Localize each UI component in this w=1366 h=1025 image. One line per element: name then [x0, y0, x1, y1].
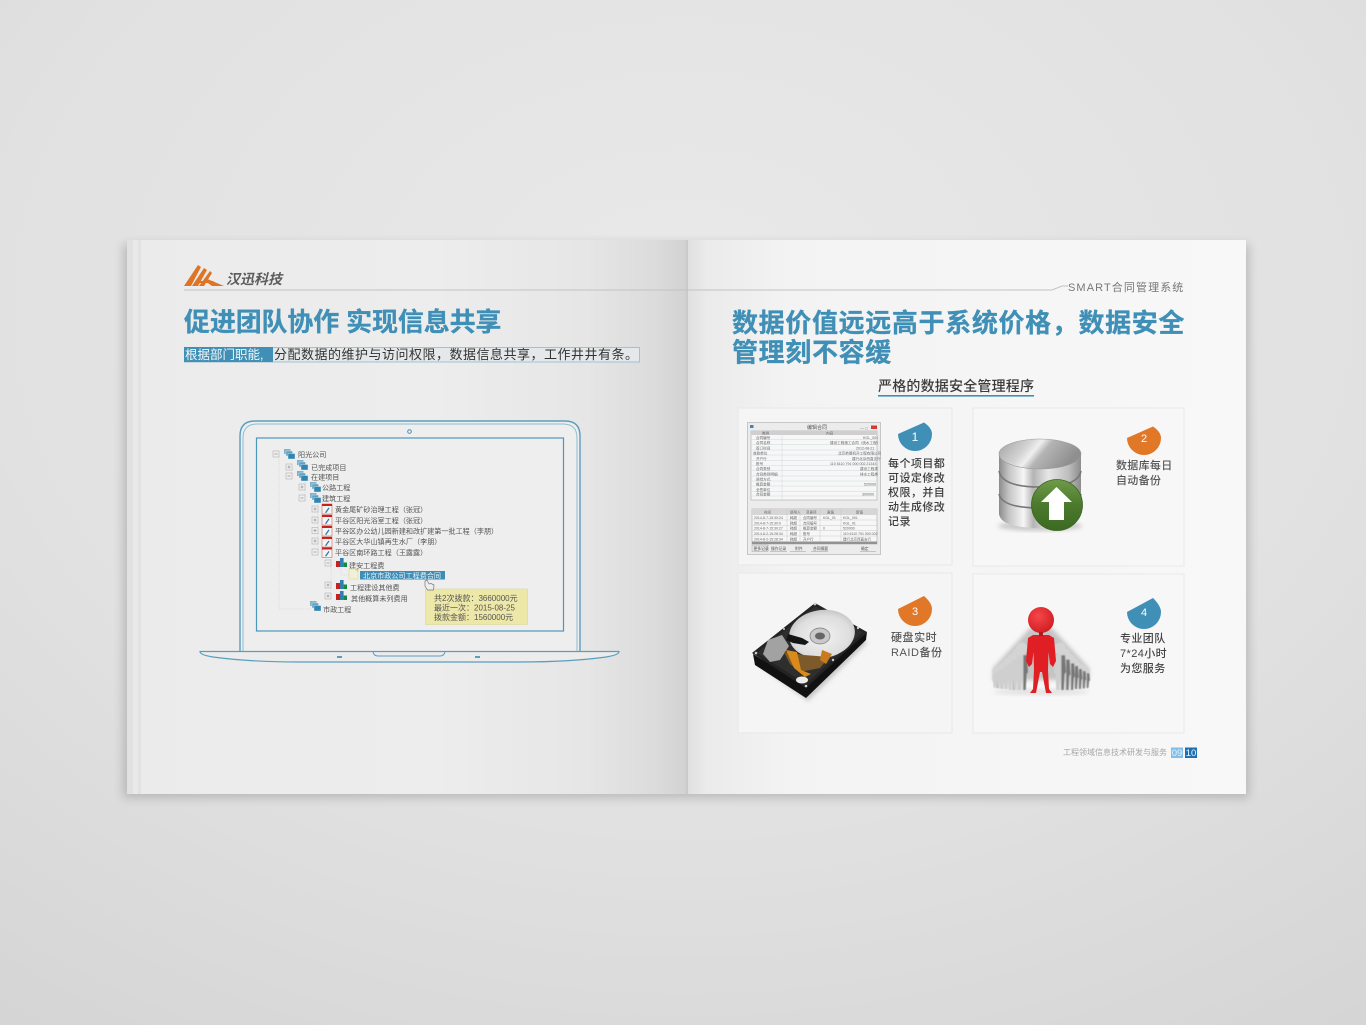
- screenshot: contract editor: — □: [860, 426, 868, 430]
- panel: card 4: [973, 574, 1184, 733]
- screenshot: contract editor: 全签单位: [756, 487, 771, 492]
- screenshot: contract editor: 原值: [827, 510, 834, 514]
- tree row: 已完成项目: 已完成项目: [311, 463, 346, 472]
- screenshot: contract editor: 建设工程施工合同（统水工程）: [830, 440, 880, 445]
- right heading: 数据价值远远高于系统价格，数据安全: [732, 308, 1185, 338]
- screenshot: contract editor: 韩超: [790, 526, 798, 530]
- screenshot: contract editor: 质结方式: [756, 476, 771, 482]
- badge 3: 3: [912, 606, 918, 618]
- tooltip: 最近一次：2015-08-25: [434, 602, 515, 612]
- tree row: selected contract: 北京市政公司工程费合同: [363, 571, 441, 580]
- screenshot: contract editor: 110 6110 791 000 002 21343: [830, 462, 876, 466]
- screenshot: contract editor: 北京弟德机开工程有限公司: [838, 450, 882, 456]
- tree row: 平谷区大华山镇再生水厂: [312, 537, 441, 547]
- card 1 text: [888, 456, 945, 528]
- screenshot: contract editor: 520000: [864, 482, 876, 486]
- screenshot: contract editor: KGL_01: [823, 516, 836, 520]
- tree row: 阳光公司: [273, 449, 326, 459]
- panel: card 2: [973, 408, 1184, 566]
- tree row: 在建项目: 在建项目: [311, 472, 339, 482]
- card 2 text: 自动备份: [1116, 473, 1161, 487]
- screenshot: contract editor: 确定: [861, 546, 869, 551]
- team crowd: [992, 628, 1090, 690]
- tree row: 建安工程费: [325, 558, 384, 570]
- card 4 text: 为您服务: [1120, 661, 1166, 675]
- panel: card 3: [738, 573, 952, 733]
- left subheading: 根据部门职能,: [185, 347, 263, 362]
- red leader: [1026, 607, 1056, 693]
- screenshot: contract editor: 开户行: [803, 536, 814, 542]
- tree row: 建筑工程: 建筑工程: [322, 494, 350, 503]
- tree row: 公路工程: 公路工程: [322, 483, 350, 492]
- screenshot: contract editor: 概算金额: [756, 482, 771, 486]
- tree row: 平谷区阳光浴室工程: [312, 515, 427, 525]
- tooltip: 拨款金额：1560000元: [434, 612, 513, 622]
- screenshot: contract editor: 合同类别明细: [756, 472, 778, 476]
- left subheading: 分配数据的维护与访问权限，数据信息共享，工作井井有条。: [274, 347, 639, 362]
- screenshot: contract editor: 建行北京西直支行: [843, 536, 871, 542]
- icon: database with upload arrow: [998, 439, 1082, 531]
- tooltip: [426, 589, 528, 624]
- tree row: 平谷区阳光浴室工程: 平谷区阳光浴室工程（张冠）: [335, 516, 427, 525]
- screenshot: contract editor: 签订时间: [756, 446, 771, 450]
- tree row: 市政工程: [310, 601, 351, 614]
- screenshot: contract editor: 建设工程类: [860, 466, 878, 471]
- screenshot: contract editor: 新值: [856, 510, 864, 514]
- laptop base: [200, 652, 619, 662]
- card 2 text: [1116, 458, 1172, 487]
- screenshot: contract editor: 2014-8-7-15:30:27: [754, 526, 783, 530]
- brand name: 汉迅科技: [226, 271, 284, 287]
- tree connectors: [279, 457, 349, 609]
- screenshot: contract editor: 账号: [756, 461, 764, 466]
- screenshot: contract editor: KGL_001: [843, 516, 858, 520]
- tree row: 平谷区大华山镇再生水厂: 平谷区大华山镇再生水厂（李朋）: [335, 537, 441, 546]
- tree row: selected contract: [349, 569, 445, 580]
- screenshot: contract editor: 建行北京西直支行: [852, 456, 881, 461]
- tree row: 建筑工程: [299, 493, 350, 503]
- panel: card 1: [738, 408, 952, 565]
- screenshot: contract editor: 附件: [795, 546, 803, 551]
- card 4 text: 7*24小时: [1120, 646, 1167, 660]
- card 1 text: 记录: [888, 515, 911, 528]
- screenshot: contract editor: 使用人: [790, 510, 801, 514]
- screenshot: contract editor: 内容: [826, 430, 834, 435]
- right heading: [732, 308, 1185, 368]
- tree row: 已完成项目: [286, 460, 346, 472]
- screenshot: contract editor: 收款单位: [753, 450, 768, 456]
- footer: 10: [1186, 748, 1196, 759]
- icon: logo mark: [184, 265, 224, 286]
- tree row: 工程建设其他费: [325, 580, 400, 592]
- card 2 text: 数据库每日: [1116, 458, 1172, 472]
- screenshot: contract editor: 合同金额: [756, 492, 771, 496]
- screenshot: contract editor: 韩超: [790, 531, 798, 536]
- left heading: 促进团队协作 实现信息共享: [184, 307, 501, 337]
- screenshot: contract editor: 韩超: [790, 520, 798, 526]
- screenshot: contract editor: 操作记录: [771, 546, 786, 551]
- screenshot: contract editor: 合同编号: [756, 435, 771, 440]
- screenshot: contract editor: 时间: [764, 510, 772, 514]
- card 1 text: 可设定修改: [888, 470, 945, 484]
- tree row: 其他概算未列费用: [325, 591, 408, 603]
- laptop illustration: [200, 421, 619, 662]
- screenshot: contract editor: 2012-08-21: [856, 446, 874, 450]
- camera: [408, 430, 411, 433]
- section subtitle: 严格的数据安全管理程序: [878, 378, 1034, 394]
- laptop lid: [240, 421, 580, 652]
- card 3 text: 硬盘实时: [891, 630, 937, 644]
- screenshot: contract editor: KGL_001: [863, 436, 878, 440]
- running header: SMART合同管理系统: [1068, 280, 1184, 294]
- badge 4: [1127, 598, 1161, 629]
- screenshot: contract editor: 韩超: [790, 536, 798, 542]
- gutter: [686, 240, 688, 794]
- screenshot: contract editor: 概算金额: [803, 526, 817, 530]
- footer: [1063, 747, 1197, 759]
- screenshot: contract editor: 0: [823, 526, 825, 530]
- tree row: 平谷区南环路工程: 平谷区南环路工程（王露露）: [335, 548, 427, 557]
- header rule: [184, 286, 1068, 290]
- tree row: 在建项目: [286, 471, 339, 482]
- screenshot: contract editor: 变更项: [806, 510, 817, 514]
- screenshot: contract editor: 合同摘要: [813, 546, 828, 551]
- screenshot: contract editor: 合同编号: [803, 515, 817, 520]
- badge 4: 4: [1141, 607, 1147, 619]
- badge 2: [1127, 426, 1161, 455]
- file tree: [273, 449, 498, 614]
- screenshot: contract editor: 开户行: [756, 456, 767, 461]
- card 4 text: 专业团队: [1120, 631, 1166, 645]
- tree row: 平谷区南环路工程: [312, 548, 427, 558]
- badge 3: [898, 596, 932, 626]
- screenshot: contract editor: 编辑合同: [807, 424, 827, 431]
- tree row: 工程建设其他费: 工程建设其他费: [350, 583, 400, 592]
- card 3 text: [891, 630, 943, 659]
- screenshot: contract editor: 合同名称: [756, 440, 771, 445]
- tree row: 黄金尾矿砂治理工程: [312, 504, 427, 514]
- card 1 text: 动生成修改: [888, 500, 945, 514]
- panel: right page: [688, 240, 1246, 794]
- screenshot: contract editor: 韩超: [790, 515, 798, 520]
- screenshot: contract editor: 更多记录: [754, 546, 769, 551]
- tooltip: 共2次拨款：3660000元: [434, 593, 518, 603]
- icon: hard disk: [752, 603, 868, 701]
- tree row: 建安工程费: 建安工程费: [349, 561, 384, 570]
- screenshot: contract editor: 2014-8-2-15:28:34: [754, 532, 783, 536]
- screenshot: contract editor: [748, 422, 882, 554]
- tree row: 其他概算未列费用: 其他概算未列费用: [351, 594, 408, 603]
- screenshot: contract editor: 合同类别: [756, 466, 771, 471]
- screenshot: contract editor: 排水工程类: [860, 472, 878, 476]
- badge 2: 2: [1141, 433, 1147, 445]
- right heading: 管理刻不容缓: [732, 338, 892, 368]
- panel: left page: [127, 240, 686, 794]
- screenshot: contract editor: 300000: [862, 492, 874, 496]
- icon: hand cursor: [425, 580, 434, 590]
- logo: Hanxun: [184, 265, 284, 287]
- screenshot: contract editor: KGL_01: [843, 522, 856, 526]
- tree row: 阳光公司: 阳光公司: [298, 450, 326, 459]
- screenshot: contract editor: 2014-8-7-15:30:0: [754, 522, 781, 526]
- badge 1: [898, 422, 932, 451]
- screen: [256, 438, 564, 631]
- card 1 text: 每个项目都: [888, 456, 945, 470]
- screenshot: contract editor: 2014-8-2-15:28:34: [754, 538, 783, 542]
- book shadow: [123, 244, 1249, 798]
- screenshot: contract editor: 类别: [762, 430, 770, 435]
- screenshot: contract editor: 合同编号: [803, 520, 817, 526]
- tree row: 市政工程: 市政工程: [323, 605, 351, 614]
- badge 1: 1: [912, 430, 919, 444]
- screenshot: contract editor: 110 6110 791 000 002: [843, 532, 878, 536]
- screenshot: contract editor: 账号: [803, 531, 810, 536]
- card 1 text: 权限，并自: [888, 485, 945, 499]
- tree row: 平谷区办公幼儿园: 平谷区办公幼儿园新建和改扩建第一批工程（李朋）: [335, 526, 498, 536]
- screenshot: contract editor: 2014-8-7-15:30:24: [754, 516, 783, 520]
- footer: 工程领域信息技术研发与服务: [1063, 747, 1167, 757]
- tree row: 黄金尾矿砂治理工程: 黄金尾矿砂治理工程（张冠）: [335, 505, 427, 514]
- tree row: 公路工程: [299, 482, 350, 492]
- card 3 text: RAID备份: [891, 645, 943, 659]
- footer: 09: [1172, 748, 1182, 759]
- icon: red leader and team: [992, 607, 1090, 695]
- card 4 text: [1120, 631, 1167, 675]
- screenshot: contract editor: 520000: [843, 526, 855, 530]
